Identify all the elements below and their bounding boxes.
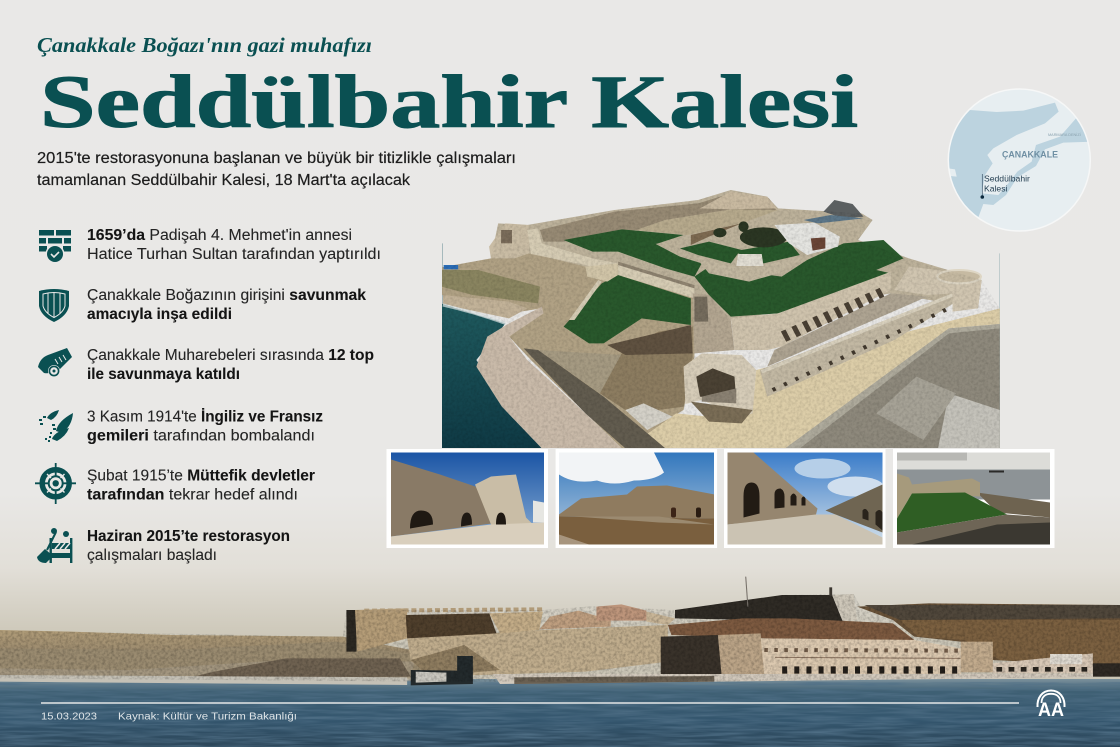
aerial: pale ramparts [527,228,694,298]
aerial: front bastion [684,353,756,417]
map label: Çanakkale: ÇANAKKALE [1002,150,1058,160]
fact 3 text [87,347,374,383]
map label: Seddülbahir Kalesi: Seddülbahir [984,174,1030,184]
map label: Seddülbahir Kalesi: Kalesi [984,184,1007,194]
fact 5 text: tarafından tekrar hedef alındı [87,486,298,504]
aerial: round tower [894,267,982,312]
aerial: ground [442,243,694,448]
fact 4 text: gemileri tarafından bombalandı [87,428,315,444]
aerial: left and right edge lines [442,243,1000,448]
map: sea [949,102,1087,217]
aerial: grey shore [785,325,1000,448]
fact 1 text: 1659’da Padişah 4. Mehmet'in annesi [87,227,352,244]
fact 2 text [87,287,366,323]
icon: brick wall with check [39,230,71,264]
fact 6 text: çalışmaları başladı [87,547,217,564]
fact 6 [37,528,290,564]
map marker [980,174,984,199]
aerial: white buildings [774,223,840,255]
fact 2 text: amacıyla inşa edildi [87,306,232,323]
fact 4 [39,408,323,444]
aerial: terrace [767,293,927,367]
panorama: sea [0,679,1120,747]
fact 1 text: Hatice Turhan Sultan tarafından yaptırıldı [87,246,381,263]
aerial: back wall [540,193,776,242]
icon: cannon [38,348,72,377]
aerial: sand [644,308,1000,448]
icon: roadworks barrier and shovel [37,528,72,563]
intro text: 2015'te restorasyonuna başlanan ve büyük bir titizlikle çalışmaları [37,150,516,167]
fact 2 text: Çanakkale Boğazının girişini savunmak [87,287,366,304]
aerial: outer wall [760,293,953,397]
fact 1 text [87,227,381,263]
panel: historic panorama at the bottom [0,577,1120,747]
panorama: grain texture [0,590,1120,685]
map label: Seddülbahir Kalesi [984,174,1030,194]
fact 3 [38,347,374,383]
icon: falling bombs [39,410,73,442]
aerial: central ramp [693,293,734,353]
intro text: tamamlanan Seddülbahir Kalesi, 18 Mart'ta açılacak [37,172,410,189]
subtitle heading: Çanakkale Boğazı'nın gazi muhafızı [37,33,372,57]
logo: AA [1037,690,1065,721]
aerial: concrete road [524,348,665,448]
icon: target crosshair [35,463,76,504]
fact 5 [35,463,315,504]
photo 3 [724,449,886,548]
aerial: casemate wall [731,272,891,350]
title: Seddülbahir Kalesi [40,61,858,144]
fact 2 [39,287,366,323]
fact 4 text: 3 Kasım 1914'te İngiliz ve Fransız [87,408,323,426]
footer divider line [41,702,1019,704]
map: border ring [948,89,1090,231]
map label: sea of Marmara: MARMARA DENİZİ [1048,132,1081,137]
logo: AA: AA [1038,700,1064,721]
fact 5 text [87,468,315,504]
aerial: sea [442,304,542,448]
aerial: excavated earth [600,327,693,410]
fact list [35,227,381,564]
map: circle land [948,89,1090,231]
fact 1 [39,227,381,264]
footer date: 15.03.2023 [41,710,97,722]
footer source: Kaynak: Kültür ve Turizm Bakanlığı [118,710,297,722]
aerial: fortress base [491,190,982,320]
aerial: trees [713,221,787,247]
intro text [37,150,516,189]
aerial: left bastion [489,223,529,258]
fact 6 text: Haziran 2015’te restorasyon [87,528,290,545]
fact 3 text: ile savunmaya katıldı [87,366,240,383]
photo 2 [556,449,717,548]
panorama: fortress and shore [0,577,1120,685]
fact 5 text: Şubat 1915’te Müttefik devletler [87,468,315,484]
panel: aerial photo of the fortress [442,190,1000,448]
aerial: green fields [564,229,903,343]
aerial: texture [442,190,1000,448]
aerial: breakwater rocks [476,307,622,448]
photo 1 [386,449,548,548]
aerial: inner courtyard [700,262,772,282]
fact 4 text [87,408,323,444]
icon: shield [39,289,69,322]
fact 3 text: Çanakkale Muharebeleri sırasında 12 top [87,347,374,364]
photo 4 [893,449,1054,548]
fact 6 text [87,528,290,564]
aerial: dark tower [824,200,864,218]
locator map [940,89,1093,231]
